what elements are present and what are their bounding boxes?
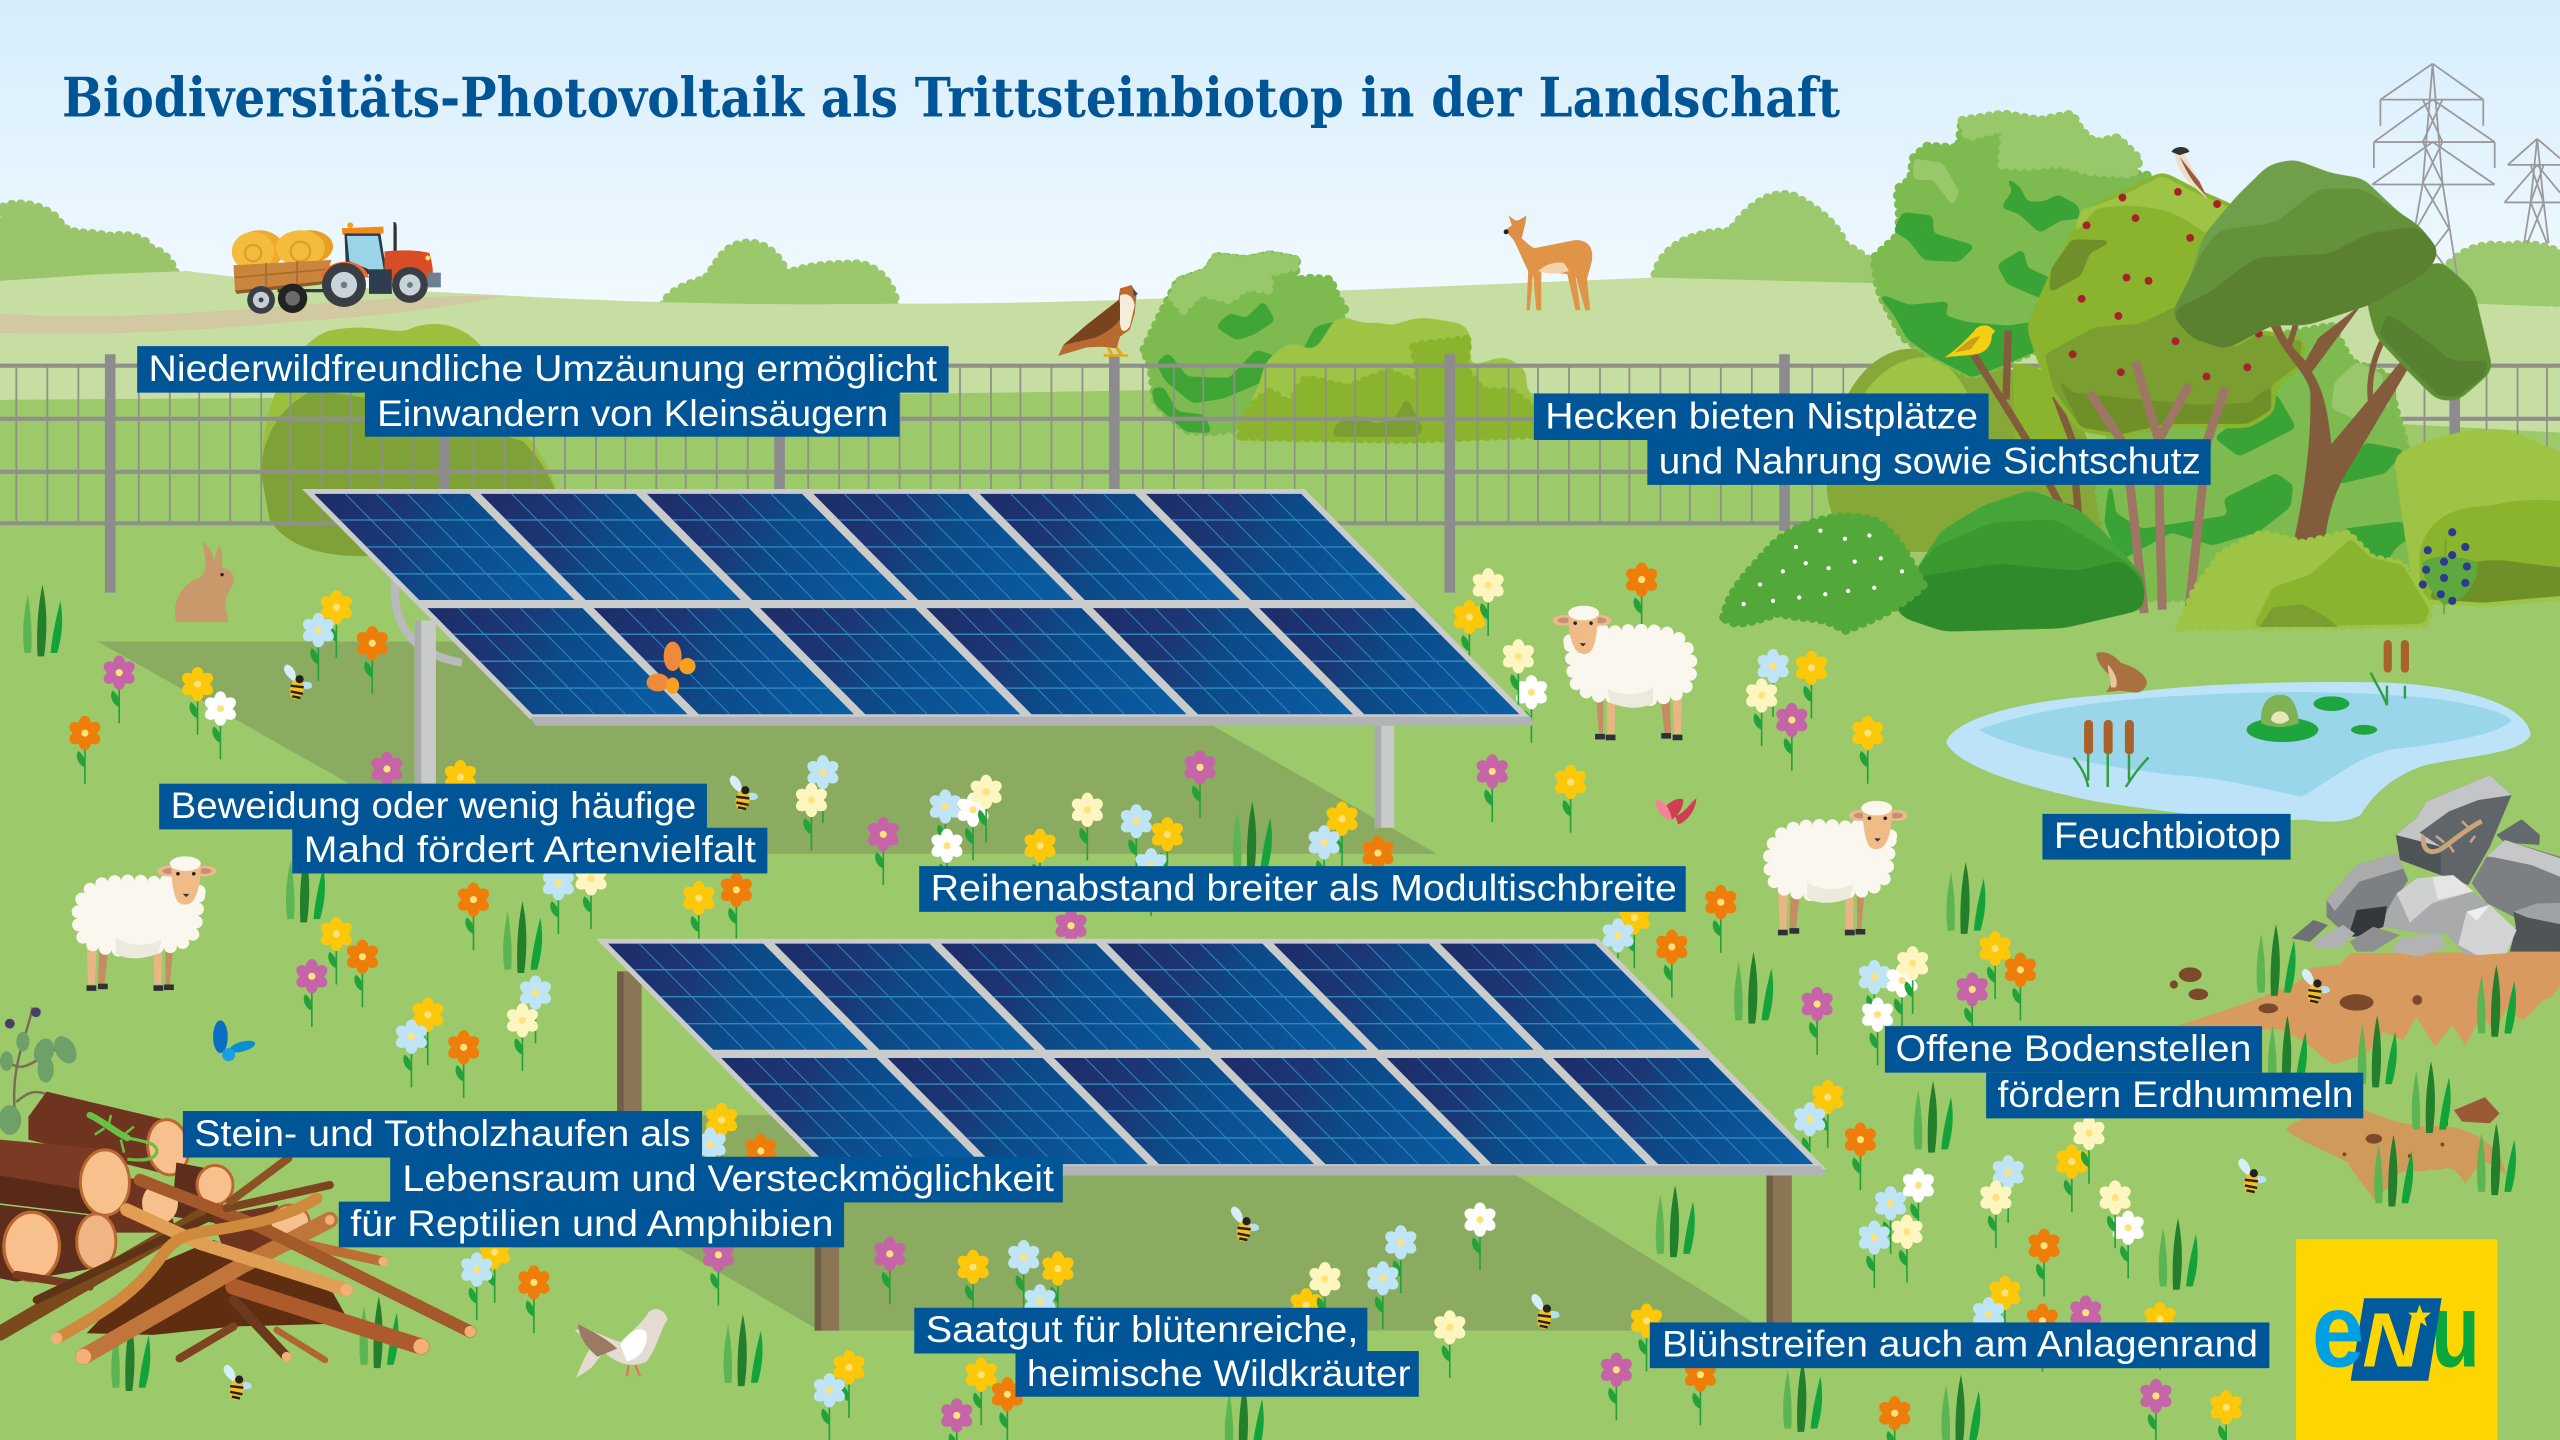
logo: eNu: u: [2431, 1273, 2480, 1390]
icon: blackberry plant: [0, 1007, 81, 1135]
grass tufts: [23, 584, 2516, 1440]
label: Offene Bodenstellen: [1885, 1026, 2363, 1118]
label: Feuchtbiotop: Feuchtbiotop: [2054, 815, 2281, 856]
green bush behind trees: [2098, 327, 2429, 598]
icon: bee on soil: [2302, 969, 2330, 1005]
label: Offene Bodenstellen: fördern Erdhummeln: [1998, 1074, 2353, 1115]
bare soil patch: [2178, 952, 2560, 1064]
hedge behind fence, left: [261, 324, 563, 556]
icon: green lizard on logs: [90, 1115, 157, 1160]
label: Stein- und Totholzhaufen: Stein- und Totholzhaufen als: [194, 1113, 691, 1154]
label: Blühstreifen: Blühstreifen auch am Anlagenrand: [1662, 1324, 2258, 1365]
icon: yellowhammer: [1944, 325, 1995, 358]
white blossom bush: [1724, 517, 1923, 630]
label: Umzäunung: Einwandern von Kleinsäugern: [377, 393, 888, 434]
right hedge: [2398, 434, 2560, 602]
logo: eNu: e: [2312, 1273, 2364, 1390]
label: Umzäunung: [137, 346, 949, 437]
icon: blue butterfly: [213, 1020, 256, 1061]
icon: toad: [2096, 652, 2147, 693]
flowers across meadow: [67, 562, 2244, 1440]
icon: first array supports: [395, 580, 1394, 828]
main meadow: [0, 390, 2560, 1440]
label: Beweidung: Mahd fördert Artenvielfalt: [304, 829, 756, 870]
title: Biodiversitäts-Photovoltaik als Trittsteinbiotop in der Landschaft: [62, 66, 1840, 130]
icon: blueberry bush: [2419, 528, 2477, 614]
label: Reihenabstand: Reihenabstand breiter als Modultischbreite: [931, 867, 1677, 908]
logo: eNu: N: [2362, 1299, 2423, 1384]
label: Saatgut: heimische Wildkräuter: [1027, 1353, 1411, 1394]
icon: red butterfly: [1656, 798, 1696, 824]
hills: [0, 271, 2560, 490]
tree A: [1874, 114, 2149, 376]
icon: bees: [224, 664, 2266, 1401]
label: Stein- und Totholzhaufen: [183, 1111, 1063, 1247]
icon: log and brushwood pile: [0, 1092, 476, 1365]
label: Offene Bodenstellen: Offene Bodenstellen: [1896, 1028, 2251, 1069]
icon: frog: [2261, 695, 2299, 727]
icon: dove: [575, 1309, 668, 1378]
thin trunks: [2090, 362, 2225, 613]
shadow: first module row: [98, 642, 1437, 854]
dark green bush: [1897, 494, 2140, 627]
tree B apple: [2031, 176, 2303, 434]
icon: sheep left: [78, 856, 216, 991]
shadow: second module row: [449, 1115, 1767, 1331]
icon: sheep near first array: [1553, 606, 1691, 740]
trunk tree C: [2269, 304, 2415, 540]
icon: lily pads: [2247, 696, 2377, 742]
icon: shrike on apple tree: [2171, 147, 2207, 199]
hedge behind fence, centre: [1240, 320, 1533, 439]
pond: Feuchtbiotop water: [1946, 682, 2531, 822]
label: Saatgut: Saatgut für blütenreiche,: [926, 1309, 1358, 1350]
label: Beweidung: Beweidung oder wenig häufige: [171, 785, 696, 826]
fence: [0, 354, 2560, 593]
label: Hecken: [1534, 393, 2211, 485]
panel: second solar module row: [596, 939, 1826, 1176]
label: Hecken: Hecken bieten Nistplätze: [1545, 396, 1978, 437]
icon: sheep right: [1769, 801, 1908, 935]
olive hedge behind trees: [1827, 348, 2105, 552]
distant bushes: [0, 195, 2560, 317]
icon: second array supports: [617, 971, 1792, 1331]
tree group and hedges, right: [1724, 114, 2560, 630]
icon: cattails: [2073, 640, 2409, 787]
branches left: [1974, 331, 2078, 513]
label: Stein- und Totholzhaufen: Lebensraum und Versteckmöglichkeit: [402, 1158, 1054, 1199]
power pylons: [2372, 64, 2560, 276]
logo: eNu: [2296, 1239, 2497, 1440]
bush behind fence, centre: [1144, 255, 1345, 432]
field path: [0, 296, 506, 334]
icon: orange butterfly: [647, 642, 696, 694]
label: Umzäunung: Niederwildfreundliche Umzäunung ermöglicht: [149, 348, 937, 389]
bare soil mound: [2286, 1109, 2506, 1200]
label: Beweidung: [159, 784, 767, 873]
crown tree C: [2371, 265, 2488, 396]
icon: tractor with hay trailer: [232, 222, 441, 314]
icon: rabbit: [175, 542, 234, 622]
background sky: [0, 0, 2560, 310]
icon: post bird hawk: [1058, 285, 1138, 357]
panel: first solar module row: [302, 489, 1535, 726]
icon: stone pile with lizard: [2292, 775, 2560, 957]
holes and soil clods: [2170, 967, 2500, 1158]
label: Saatgut: [914, 1308, 1419, 1397]
icon: deer: [1504, 216, 1592, 310]
label: Stein- und Totholzhaufen: für Reptilien und Amphibien: [350, 1203, 833, 1244]
yellow-green bush: [2180, 534, 2429, 627]
label: Hecken: und Nahrung sowie Sichtschutz: [1659, 440, 2201, 481]
